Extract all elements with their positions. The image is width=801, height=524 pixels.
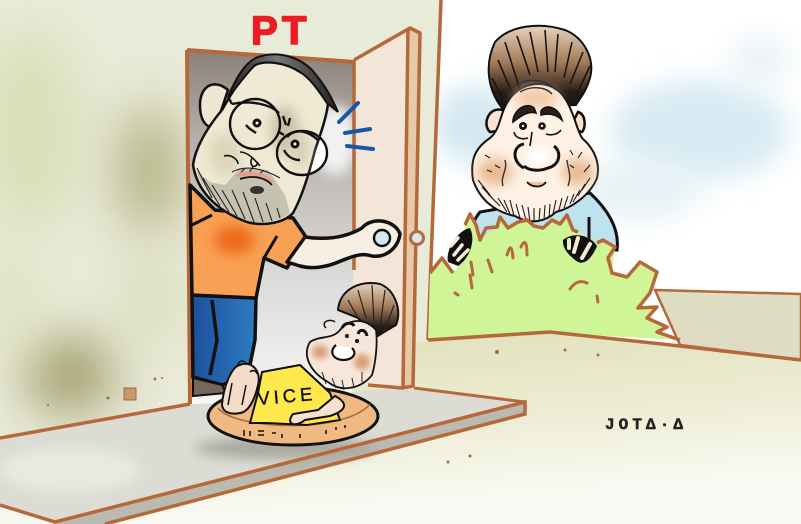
doorway — [187, 50, 357, 404]
face — [193, 62, 328, 224]
wall specks — [47, 348, 600, 464]
signature: JOTΔ·Δ — [605, 416, 683, 434]
ground — [0, 332, 801, 524]
small face — [307, 321, 377, 388]
shoe — [193, 378, 226, 396]
motion lines — [339, 103, 373, 149]
yellow cloth — [250, 365, 340, 425]
beard strokes — [478, 150, 590, 222]
small hair — [338, 283, 398, 337]
right lens back — [277, 131, 327, 175]
small nose — [332, 345, 354, 360]
trousers — [192, 295, 256, 385]
ear — [200, 84, 228, 127]
man — [190, 54, 400, 396]
eyebrows — [513, 106, 562, 122]
ears — [486, 109, 585, 132]
hands on bush — [448, 228, 597, 266]
door — [354, 27, 424, 388]
house wall — [0, 0, 441, 440]
basket — [208, 387, 378, 445]
bush — [428, 214, 801, 360]
far wall — [655, 290, 801, 360]
man behind the bush — [468, 26, 617, 250]
arm — [287, 221, 400, 268]
arm — [290, 396, 344, 424]
basket with baby — [208, 283, 398, 445]
blue shirt — [468, 193, 617, 250]
sky — [437, 34, 798, 225]
eyes — [519, 122, 527, 130]
title: PT: T — [282, 9, 306, 53]
label VICE: VICE — [257, 383, 313, 409]
big face — [472, 84, 598, 221]
orange shirt — [190, 185, 306, 298]
nose — [515, 144, 559, 170]
doorstep — [0, 388, 525, 524]
mouth — [238, 174, 272, 183]
eyes — [252, 118, 300, 148]
glasses — [228, 97, 327, 175]
mouth — [527, 182, 546, 186]
nose — [224, 152, 260, 166]
big hair — [489, 26, 591, 108]
beard — [196, 168, 290, 222]
doorknob — [374, 230, 390, 246]
feet — [222, 364, 259, 414]
hair — [228, 54, 338, 112]
title: PT: P — [251, 9, 278, 53]
